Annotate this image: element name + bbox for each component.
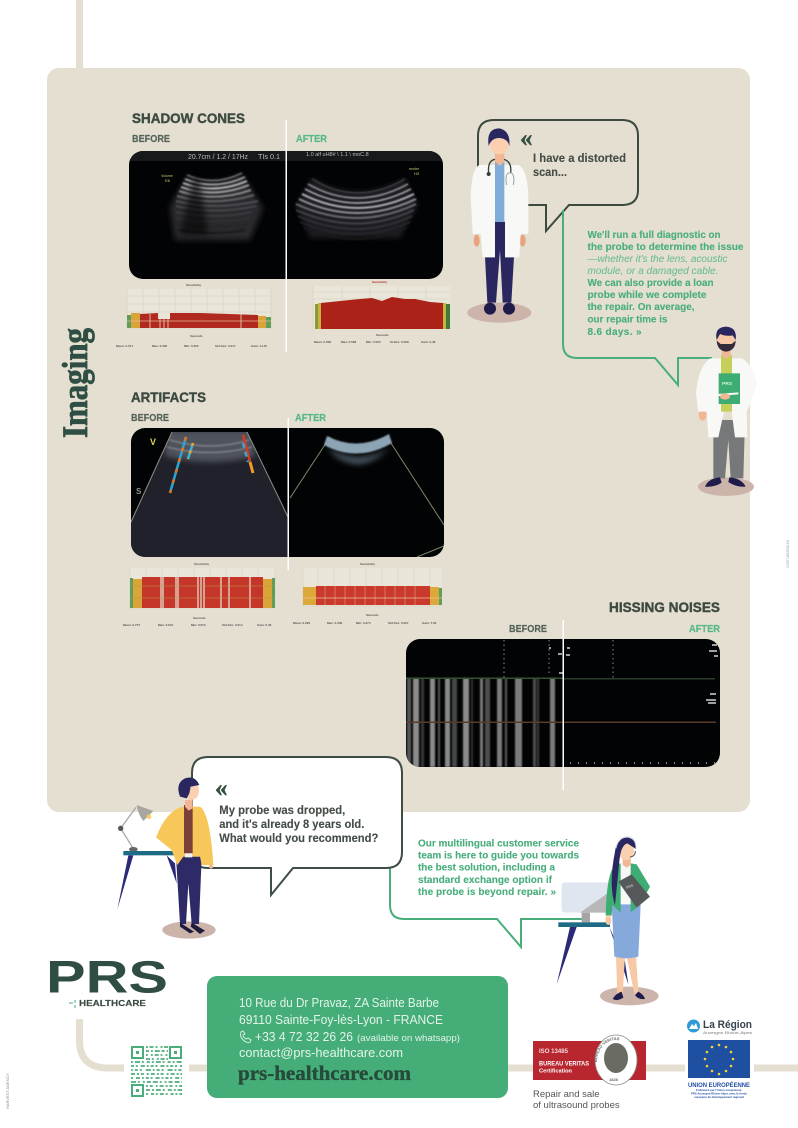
speech bubble: green diagnostic answer: the probe to determine the issue [588, 242, 744, 253]
scan image: shadow cones before and after: Volume [161, 174, 173, 178]
section heading: artifacts: ARTIFACTS [131, 389, 206, 405]
panel: imaging background [47, 68, 750, 812]
scan image: shadow cones before and after [129, 151, 443, 279]
chart: artifacts after sensitivity: Mean: 0.296 [293, 621, 310, 625]
speech bubble: green diagnostic answer: module, or a damaged cable. [588, 266, 718, 277]
section heading: shadow cones: SHADOW CONES [132, 110, 245, 126]
side note: agency credit: HARVEST AGENCY [6, 1073, 10, 1109]
chart: artifacts before sensitivity: Seconds [193, 616, 206, 620]
logo: European Union flag: européen de développement régional [694, 1095, 744, 1099]
chart: artifacts before sensitivity: Std Dev: 0.014 [222, 623, 243, 627]
logo: PRS Healthcare: PRS [46, 952, 168, 1002]
chart: artifacts after sensitivity: Min: 0.274 [356, 621, 371, 625]
scan image: artifacts before and after: V [150, 437, 156, 447]
chart: shadow cones after sensitivity: St.Dev: 0.008 [390, 340, 409, 344]
chart: shadow cones after sensitivity: Mean: 0.508 [314, 340, 331, 344]
contact panel: contact@prs-healthcare.com [239, 1046, 403, 1060]
logo: European Union flag [688, 1040, 750, 1099]
speech bubble: dropped probe question: « [215, 775, 228, 802]
scan image: artifacts before and after [131, 428, 444, 557]
chart: artifacts before sensitivity: Gain: 5.46 [257, 623, 272, 627]
contact panel: prs-healthcare.com [238, 1061, 411, 1085]
speech bubble: green exchange answer: Our multilingual customer service [418, 838, 579, 850]
speech bubble: green diagnostic answer: We can also provide a loan [588, 278, 714, 289]
contact panel: 10 Rue du Dr Pravaz, ZA Sainte Barbe [239, 996, 439, 1010]
section heading: shadow cones: BEFORE [132, 133, 170, 145]
scan image: shadow cones before and after: E8 [165, 178, 171, 183]
chart: shadow cones before sensitivity: Gain: 14.45 [251, 344, 267, 348]
scan image: hissing noises before and after [406, 639, 720, 767]
certification badge: ISO 13485 Bureau Veritas: BUREAU VERITAS [539, 1060, 590, 1068]
chart: artifacts after sensitivity: Std Dev: 0.007 [388, 621, 409, 625]
section heading: artifacts: AFTER [295, 412, 326, 424]
section heading: shadow cones: AFTER [296, 133, 327, 145]
chart: artifacts before sensitivity: Min: 0.673 [191, 623, 206, 627]
chart: shadow cones before sensitivity: Sensitivity [186, 283, 201, 287]
QR code [131, 1047, 182, 1096]
section heading: artifacts: BEFORE [131, 412, 169, 424]
speech bubble: green diagnostic answer [563, 210, 744, 385]
chart: shadow cones after sensitivity: Min: 0.550 [366, 340, 381, 344]
section heading: hissing noises: AFTER [689, 623, 720, 635]
chart: artifacts before sensitivity: Sensitivity [194, 562, 209, 566]
speech bubble: green exchange answer: standard exchange option if [418, 875, 553, 886]
speech bubble: green diagnostic answer: the repair. On average, [588, 302, 695, 313]
section heading: hissing noises: HISSING NOISES [609, 599, 720, 615]
figure: doctor with stethoscope [467, 128, 531, 323]
logo: European Union flag: Cofinancé par l'Union européenne. [696, 1088, 742, 1092]
chart: shadow cones after sensitivity: Gain: 9.48 [421, 340, 436, 344]
certification badge: ISO 13485 Bureau Veritas [533, 1034, 646, 1086]
contact panel: 69110 Sainte-Foy-lès-Lyon - FRANCE [239, 1013, 443, 1027]
chart: artifacts before sensitivity: Max: 0.841 [158, 623, 174, 627]
chart: artifacts after sensitivity: Seconds [366, 613, 379, 617]
scan image: artifacts before and after: S [136, 487, 142, 496]
chart: artifacts after sensitivity [293, 562, 442, 625]
chart: artifacts before sensitivity [123, 562, 275, 627]
speech bubble: green diagnostic answer: —whether it's the lens, acoustic [587, 254, 728, 265]
chart: artifacts after sensitivity: Gain: 7.50 [422, 621, 437, 625]
speech bubble: green diagnostic answer: probe while we complete [588, 290, 707, 301]
decorative top stripe [76, 0, 83, 70]
chart: shadow cones after sensitivity: Seconds [376, 333, 389, 337]
figure: man in yellow jacket at desk with lamp [117, 777, 216, 939]
chart: shadow cones before sensitivity: Max: 0.392 [152, 344, 168, 348]
speech bubble: green exchange answer: the best solution, including a [418, 862, 555, 874]
section heading: hissing noises [509, 599, 720, 635]
figure: doctor holding green folder: PRS [722, 381, 733, 387]
speech bubble: doctor question [478, 120, 638, 231]
logo: La Région: La Région [703, 1019, 752, 1031]
caption: repair and sale: Repair and sale [533, 1089, 600, 1100]
logo: La Région [687, 1019, 752, 1035]
chart: shadow cones after sensitivity: Sensitivity [372, 280, 387, 284]
contact panel: (available on whatsapp) [357, 1033, 460, 1044]
section heading: hissing noises: BEFORE [509, 623, 547, 635]
logo: La Région: Auvergne-Rhône-Alpes [703, 1030, 752, 1035]
figure: woman with headset and monitor: PRS [626, 883, 635, 890]
chart: shadow cones before sensitivity [116, 283, 271, 348]
logo: European Union flag: UNION EUROPÉENNE [688, 1081, 750, 1089]
speech bubble: green diagnostic answer: 8.6 days. » [588, 327, 642, 338]
heading: Imaging: Imaging [55, 328, 95, 438]
side note: reference code: LIVRET-IMAGING-EN [786, 540, 790, 568]
logo: PRS Healthcare [46, 952, 168, 1008]
scan image: shadow cones before and after: TIs 0.1 [258, 154, 280, 161]
logo: European Union flag: PRS Auvergne-Rhône-Alpes avec le fonds [691, 1092, 747, 1096]
speech bubble: green exchange answer: team is here to guide you towards [418, 850, 579, 862]
speech bubble: doctor question: scan... [533, 167, 567, 179]
section heading: artifacts [131, 389, 326, 424]
chart: shadow cones after sensitivity: Max: 0.583 [341, 340, 357, 344]
divider line: hissing noises [562, 620, 564, 790]
chart: artifacts after sensitivity: Max: 0.309 [327, 621, 343, 625]
scan image: shadow cones before and after: H3 [414, 171, 420, 176]
certification badge: ISO 13485 Bureau Veritas: 1828 [609, 1077, 619, 1082]
chart: shadow cones after sensitivity [313, 280, 450, 344]
certification badge: ISO 13485 Bureau Veritas: BUREAU VERITAS [594, 1037, 620, 1062]
figure: doctor holding green folder [696, 327, 757, 496]
scan image: shadow cones before and after: 20.7cm / 1.2 / 17Hz [188, 154, 248, 161]
speech bubble: doctor question: I have a distorted [533, 153, 626, 165]
speech bubble: doctor question: « [520, 125, 532, 152]
scan image: shadow cones before and after: 1.0 alf uH8# \ 1.1 \ moC.8 [306, 152, 369, 158]
speech bubble: green diagnostic answer: We'll run a full diagnostic on [588, 230, 720, 241]
chart: shadow cones before sensitivity: Seconds [190, 334, 203, 338]
speech bubble: dropped probe question [192, 757, 402, 895]
chart: artifacts after sensitivity: Sensitivity [360, 562, 375, 566]
speech bubble: dropped probe question: and it's already 8 years old. [219, 819, 364, 831]
caption: repair and sale [533, 1089, 620, 1111]
speech bubble: green exchange answer [390, 838, 585, 947]
section heading: shadow cones [132, 110, 327, 145]
speech bubble: dropped probe question: What would you recommend? [219, 833, 378, 845]
logo: PRS Healthcare: HEALTHCARE [79, 998, 146, 1008]
divider line: artifacts [288, 418, 289, 570]
contact panel [207, 976, 508, 1098]
divider line: shadow cones [286, 120, 287, 352]
speech bubble: dropped probe question: My probe was dropped, [219, 805, 345, 817]
figure: woman with headset and monitor [557, 837, 659, 1005]
speech bubble: green exchange answer: the probe is beyond repair. » [418, 887, 556, 898]
contact panel: +33 4 72 32 26 26 [255, 1030, 353, 1044]
scan image: shadow cones before and after: render [409, 167, 420, 171]
chart: shadow cones before sensitivity: Std Dev: 0.017 [215, 344, 236, 348]
chart: artifacts before sensitivity: Mean: 0.772 [123, 623, 140, 627]
certification badge: ISO 13485 Bureau Veritas: Certification [539, 1068, 573, 1074]
speech bubble: green diagnostic answer: our repair time is [588, 314, 668, 326]
decorative bottom stripes [80, 1019, 798, 1068]
chart: shadow cones before sensitivity: Min: 0.352 [184, 344, 199, 348]
chart: shadow cones before sensitivity: Mean: 0.371 [116, 344, 133, 348]
caption: repair and sale: of ultrasound probes [533, 1100, 620, 1111]
certification badge: ISO 13485 Bureau Veritas: ISO 13485 [539, 1048, 568, 1055]
